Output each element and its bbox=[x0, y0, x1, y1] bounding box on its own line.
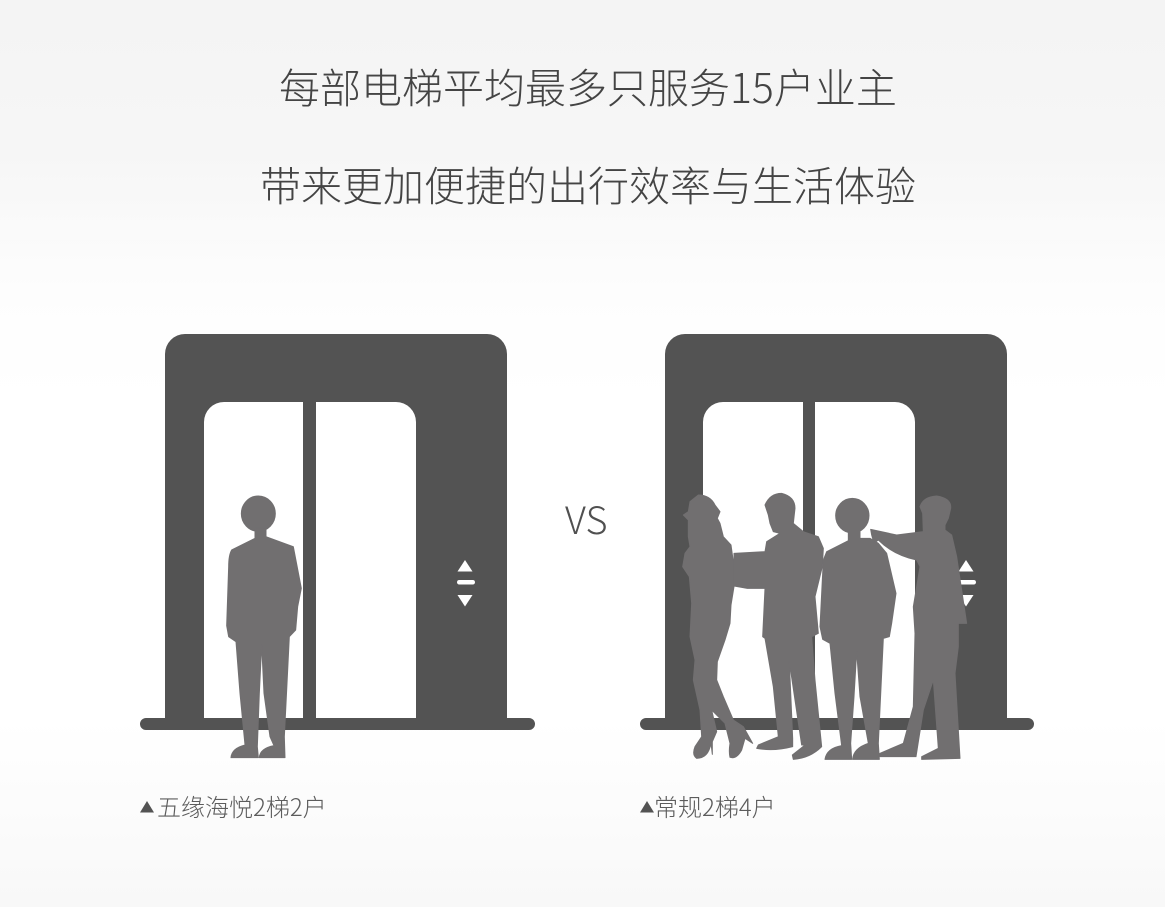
title line 1: 每部电梯平均最多只服务15户业主 bbox=[279, 55, 897, 115]
icon: caption marker left bbox=[140, 801, 154, 812]
icon: caption marker right bbox=[640, 801, 654, 812]
figure: man pointing bbox=[871, 496, 967, 759]
icon: lift call buttons bbox=[457, 560, 475, 606]
figures: four residents bbox=[683, 493, 967, 759]
figure: single resident bbox=[227, 496, 301, 758]
figure: woman bbox=[683, 495, 753, 758]
icon: lift call buttons bbox=[958, 560, 976, 606]
caption left: 五缘海悦2梯2户 bbox=[157, 788, 327, 823]
title line 2: 带来更加便捷的出行效率与生活体验 bbox=[260, 153, 916, 213]
elevator: right bbox=[640, 334, 1034, 730]
caption right: 常规2梯4户 bbox=[654, 788, 776, 823]
figure: man in suit bbox=[820, 498, 896, 759]
VS label: VS bbox=[565, 490, 608, 545]
elevator: left bbox=[140, 334, 535, 730]
figure: man with folder bbox=[734, 493, 823, 759]
